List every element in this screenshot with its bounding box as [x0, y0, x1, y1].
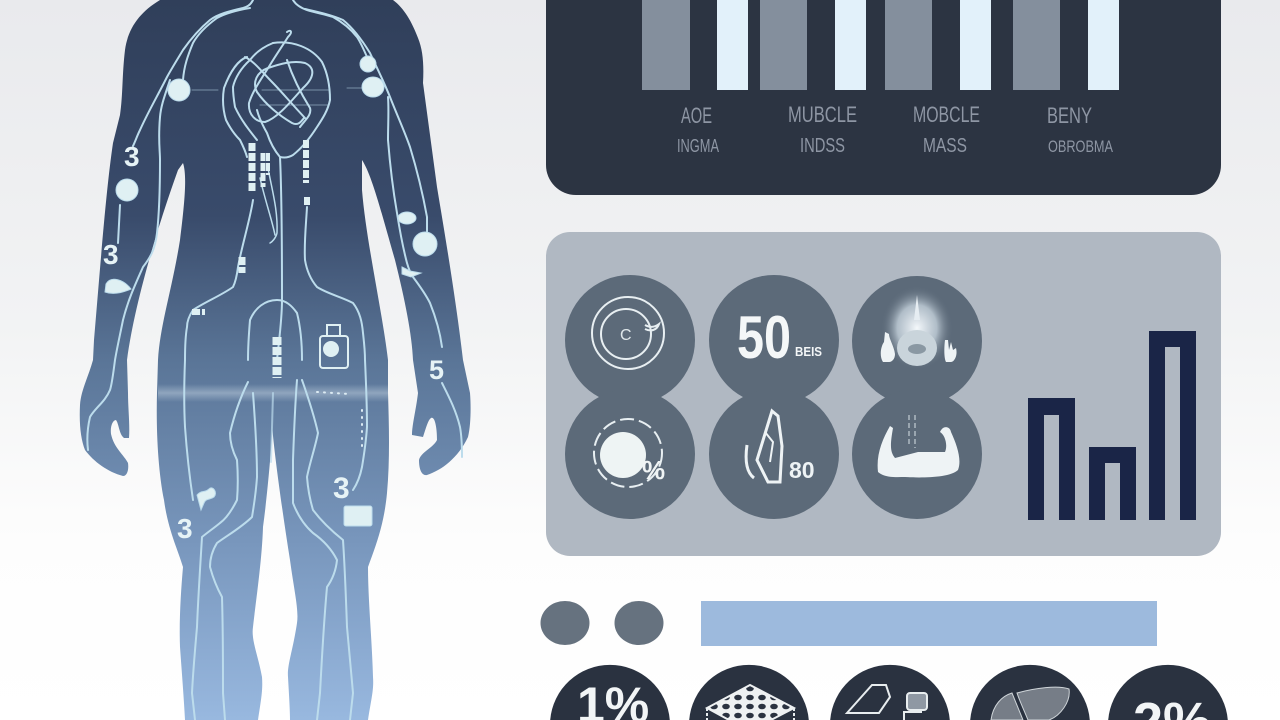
panel: legend row: [540, 601, 1157, 646]
body silhouette: [80, 0, 471, 720]
icon: mesh cube: [707, 685, 794, 720]
scattered specks near the hip: [317, 392, 362, 447]
stat: 50: 50: [737, 304, 791, 371]
bar labels: INGMA: [677, 136, 719, 156]
stray numeral marks on limbs: 5: [429, 355, 444, 385]
legend dots: [540, 601, 590, 645]
panel: bottom stat badges: [550, 665, 1228, 720]
icon: outline shape and jar: [847, 685, 927, 720]
bar labels: AOE: [681, 103, 712, 128]
bar labels: MOBCLE: [913, 102, 980, 127]
legend bar: [701, 601, 1157, 646]
metric circles: [565, 275, 982, 519]
bar labels: MUBCLE: [788, 102, 857, 127]
icon: glowing drop: [881, 286, 957, 370]
bar labels: OBROBMA: [1048, 137, 1113, 156]
icon: flexed arms: [878, 415, 959, 477]
panel: metric icons and mini chart: [546, 232, 1221, 556]
bar labels: INDSS: [800, 135, 845, 157]
icon: liver: [991, 687, 1069, 720]
stray numeral marks on limbs: 3: [333, 472, 350, 505]
grey panel background: [546, 232, 1221, 556]
bar labels: [677, 102, 1113, 157]
icon: percent ring: %: [642, 455, 665, 485]
bar labels: BENY: [1047, 103, 1092, 128]
stat: 50: BEIS: [795, 344, 822, 359]
mini bar chart: [1028, 331, 1196, 520]
nerve and vessel lines: [87, 0, 462, 720]
chest knot: [249, 31, 312, 124]
small beaded lines near the spine: [192, 140, 307, 378]
icon: percent ring: [594, 419, 665, 487]
stray numeral marks on limbs: 3: [124, 141, 140, 172]
stray numeral marks on limbs: 3: [177, 513, 193, 544]
icon: bone shape: [746, 411, 815, 483]
icon: cell: [592, 297, 664, 369]
icon: bottle on abdomen: [320, 325, 348, 368]
panel: bar chart comparison: [546, 0, 1221, 195]
small organ and node icons: [105, 56, 437, 526]
icon: cell: C: [620, 327, 632, 344]
human body figure: [80, 0, 471, 720]
horizontal light band across hips: [158, 384, 388, 402]
badge circles: [550, 665, 1228, 720]
dark panel background: [546, 0, 1221, 195]
icon: bone shape: 80: [789, 457, 815, 483]
stray numeral marks on limbs: [103, 141, 444, 544]
stray numeral marks on limbs: 3: [103, 239, 119, 270]
grey and pale paired bars: [642, 0, 1119, 90]
bar labels: MASS: [923, 135, 967, 157]
